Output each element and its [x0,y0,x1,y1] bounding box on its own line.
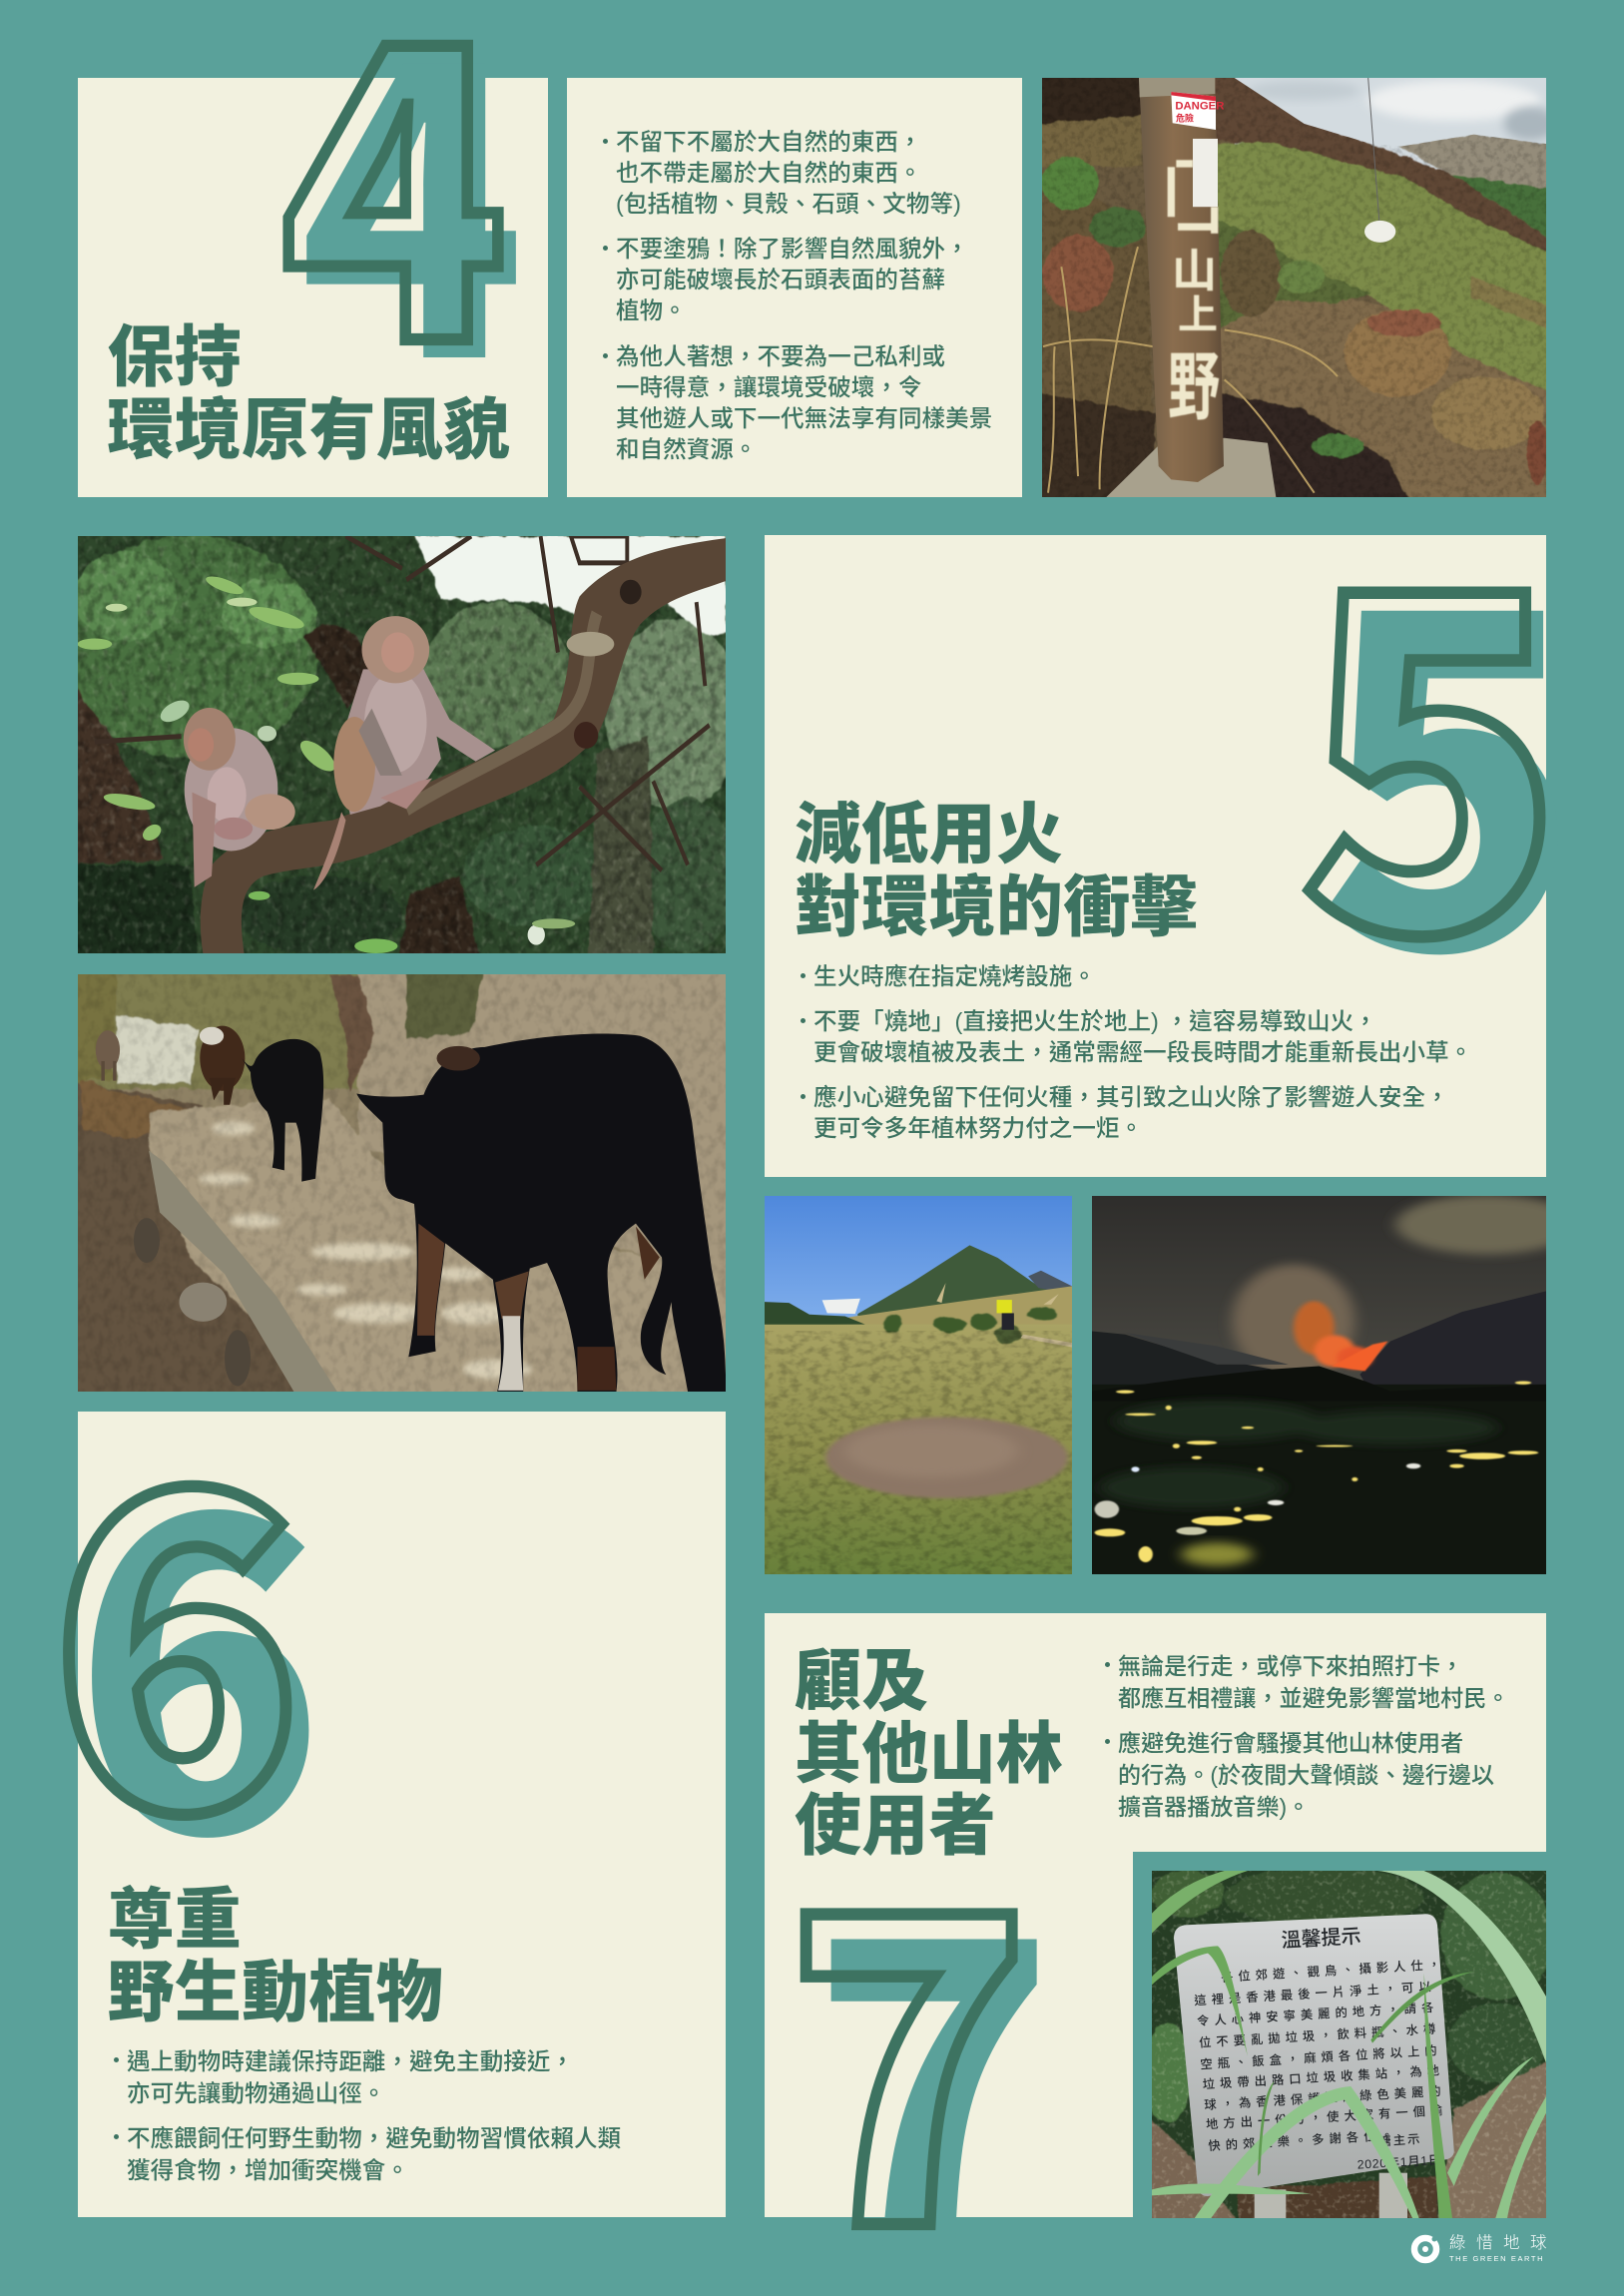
heading: section 5: 對環境的衝擊 [795,870,1198,944]
photo: graffiti on a pole on a hillside: 山 [1172,246,1217,296]
heading: section 7: 顧及 [795,1644,929,1719]
wordmark: THE GREEN EARTH [1449,2254,1544,2263]
heading: section 6: 野生動植物 [108,1955,443,2030]
bullet: think of others: 為他人著想，不要為一己私利或 [616,343,945,369]
bullet: do not feed [114,2125,621,2183]
numeral 6: 6 [72,1340,324,1956]
panel: section 6 [78,1412,726,2216]
bullet: take nothing: 不留下不屬於大自然的東西， [616,128,922,154]
heading: section 7 [795,1644,1063,1864]
panel: section 5 [765,535,1546,1177]
bullet: be courteous: 無論是行走，或停下來拍照打卡， [1118,1653,1463,1679]
photo: burnt patch on a grass field [765,1196,1072,1574]
photo: notice sign among grass: 各位郊遊、觀鳥、攝影人仕， [1221,1957,1445,1985]
bullet: leave no embers: 更可令多年植林努力付之一炬。 [813,1115,1143,1141]
photo: graffiti on a pole on a hillside [1042,78,1546,954]
bullet: leave no embers: 應小心避免留下任何火種，其引致之山火除了影響遊人安全， [813,1084,1449,1110]
bullet: keep distance [114,2048,574,2106]
bullet: no graffiti: 亦可能破壞長於石頭表面的苔蘚 [616,266,945,291]
bullet: think of others: 和自然資源。 [616,435,757,461]
bullet: designated facilities: 生火時應在指定燒烤設施。 [813,963,1096,989]
photo: hillside wildfire at night [1092,1196,1546,1574]
bullet: avoid noise: 的行為。(於夜間大聲傾談、邊行邊以 [1118,1762,1494,1788]
heading: section 4 [108,320,510,467]
panel: section 4 title card [78,78,548,497]
photo: cattle walking along a footpath [78,974,726,1392]
photo: notice sign among grass: 空瓶、飯盒，麻煩各位將以上的 [1200,2042,1442,2071]
bullet: be courteous [1105,1653,1509,1711]
photo: notice sign among grass: 塘主示 [1378,2131,1422,2148]
bullet: take nothing: 也不帶走屬於大自然的東西。 [616,160,922,186]
bullet: no graffiti [603,236,969,323]
bullet: do not feed: 不應餵飼任何野生動物，避免動物習慣依賴人類 [127,2125,621,2151]
wordmark: 綠惜地球 [1449,2234,1557,2252]
photo: notice sign among grass [1152,1871,1546,2218]
heading: section 5: 減低用火 [795,798,1063,872]
heading: section 7: 其他山林 [795,1717,1063,1791]
photo: notice sign among grass: 2020年1月1日 [1356,2153,1441,2172]
logo: The Green Earth [1411,2234,1557,2264]
bullet: think of others [603,343,992,461]
panel: section 7 [765,1613,1546,2296]
bullet: avoid noise: 應避免進行會騷擾其他山林使用者 [1118,1730,1463,1756]
numeral 5: 5 [1317,424,1581,1080]
photo: notice sign among grass: 快的郊遊樂。多謝各位。 [1208,2127,1398,2153]
wordmark [1449,2234,1557,2263]
heading: section 4: 保持 [108,320,242,395]
photo: notice sign among grass: 垃圾帶出路口垃圾收集站，為地 [1202,2062,1444,2091]
heading: section 7: 使用者 [795,1789,996,1864]
heading: section 5 [795,798,1198,944]
photo: notice sign among grass: 位不要亂拋垃圾，飲料瓶、水樽 [1199,2020,1441,2050]
bullet: keep distance: 遇上動物時建議保持距離，避免主動接近， [127,2048,574,2074]
bullet: no ground fires: 更會破壞植被及表土，通常需經一段長時間才能重新長出小草。 [813,1039,1472,1065]
bullet: avoid noise [1105,1730,1494,1820]
bullet: do not feed: 獲得食物，增加衝突機會。 [127,2157,409,2183]
bullet: take nothing: (包括植物、貝殼、石頭、文物等) [616,190,961,216]
photo: graffiti on a pole on a hillside: 危險 [1176,112,1194,123]
heading: section 6: 尊重 [108,1883,242,1958]
photo: notice sign among grass: 令人心神安寧美麗的地方，請各 [1197,2000,1439,2028]
heading: section 4: 環境原有風貌 [108,393,510,467]
photo: notice sign among grass: 溫馨提示 [1281,1925,1361,1953]
bullet: no graffiti: 植物。 [616,297,687,323]
bullet: leave no embers [801,1084,1449,1141]
bullet: take nothing [603,128,961,217]
bullet: no ground fires [801,1008,1472,1065]
numeral 6: 6 [50,1317,301,1933]
photo: graffiti on a pole on a hillside: DANGER [1175,100,1224,112]
bullet: be courteous: 都應互相禮讓，並避免影響當地村民。 [1118,1685,1509,1711]
bullet: avoid noise: 擴音器播放音樂)。 [1118,1794,1310,1820]
bullet: think of others: 一時得意，讓環境受破壞，令 [616,373,922,399]
photo: notice sign among grass: 這裡是香港最後一片淨土，可以 [1194,1979,1436,2008]
photo: macaques on a tree branch [78,536,726,953]
bullet: no graffiti: 不要塗鴉！除了影響自然風貌外， [616,236,969,262]
photo: notice sign among grass: 地方出一份力，使大家有一個愉 [1206,2102,1448,2131]
heading: section 6 [108,1883,443,2030]
panel: section 4 guidelines [567,78,1022,497]
icon: logo ring [1411,2234,1439,2264]
bullet: no ground fires: 不要「燒地」(直接把火生於地上) ，這容易導致山火， [813,1008,1377,1034]
photo: notice sign among grass: 球，為香港保護這片綠色美麗的 [1204,2083,1446,2112]
bullet: keep distance: 亦可先讓動物通過山徑。 [127,2080,385,2106]
photo: graffiti on a pole on a hillside: 上 [1178,292,1218,336]
bullet: think of others: 其他遊人或下一代無法享有同樣美景 [616,405,992,431]
numeral 5: 5 [1299,406,1563,1062]
photo: graffiti on a pole on a hillside: 野 [1168,345,1220,428]
